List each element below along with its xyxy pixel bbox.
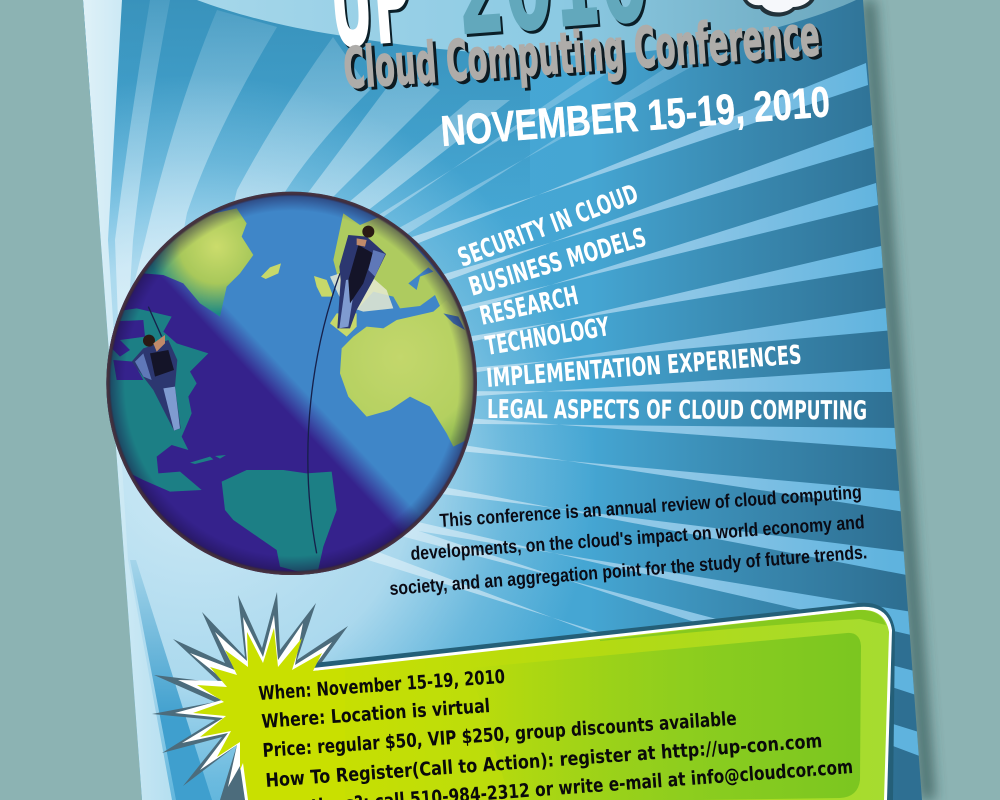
starburst outer [152, 592, 348, 800]
event details text [258, 666, 854, 800]
description paragraph [389, 482, 868, 600]
topic list: RESEARCH [477, 281, 581, 332]
details box body [300, 610, 889, 800]
event details text: How To Register(Call to Action): register at http://up-con.com [265, 730, 823, 792]
panel: event details [152, 592, 895, 800]
description paragraph: society, and an aggregation point for the study of future trends. [389, 542, 868, 600]
globe shaded rim [106, 192, 477, 575]
top light swoosh [197, 0, 856, 56]
icon: cloud logo [741, 0, 816, 17]
topic list: TECHNOLOGY [483, 312, 612, 362]
title: UP 2010 [323, 0, 656, 81]
event details text: When: November 15-19, 2010 [258, 666, 506, 705]
starburst white [175, 615, 340, 800]
description paragraph: This conference is an annual review of cloud computing [439, 482, 862, 532]
topic list: BUSINESS MODELS [466, 223, 650, 303]
land masses [103, 208, 475, 577]
businessman right [337, 226, 386, 328]
tether line [308, 273, 340, 553]
tether line left [148, 307, 162, 337]
event details text: Where: Location is virtual [261, 695, 491, 733]
box top strip [600, 610, 886, 641]
globe illustration [103, 192, 477, 577]
businessman left [132, 335, 181, 431]
details box white border [300, 607, 892, 800]
event details text: Price: regular $50, VIP $250, group discounts available [262, 708, 737, 762]
topic list [454, 179, 867, 426]
topic list: SECURITY IN CLOUD [454, 179, 643, 274]
topic list: IMPLEMENTATION EXPERIENCES [485, 340, 803, 394]
box inner panel [470, 633, 861, 800]
starburst lime [193, 628, 345, 800]
date heading: NOVEMBER 15-19, 2010 [439, 78, 832, 156]
globe ocean [106, 192, 477, 575]
details box outer edge [300, 603, 895, 800]
poster drop shadow [863, 0, 934, 800]
description paragraph: developments, on the cloud's impact on world economy and [410, 512, 865, 565]
